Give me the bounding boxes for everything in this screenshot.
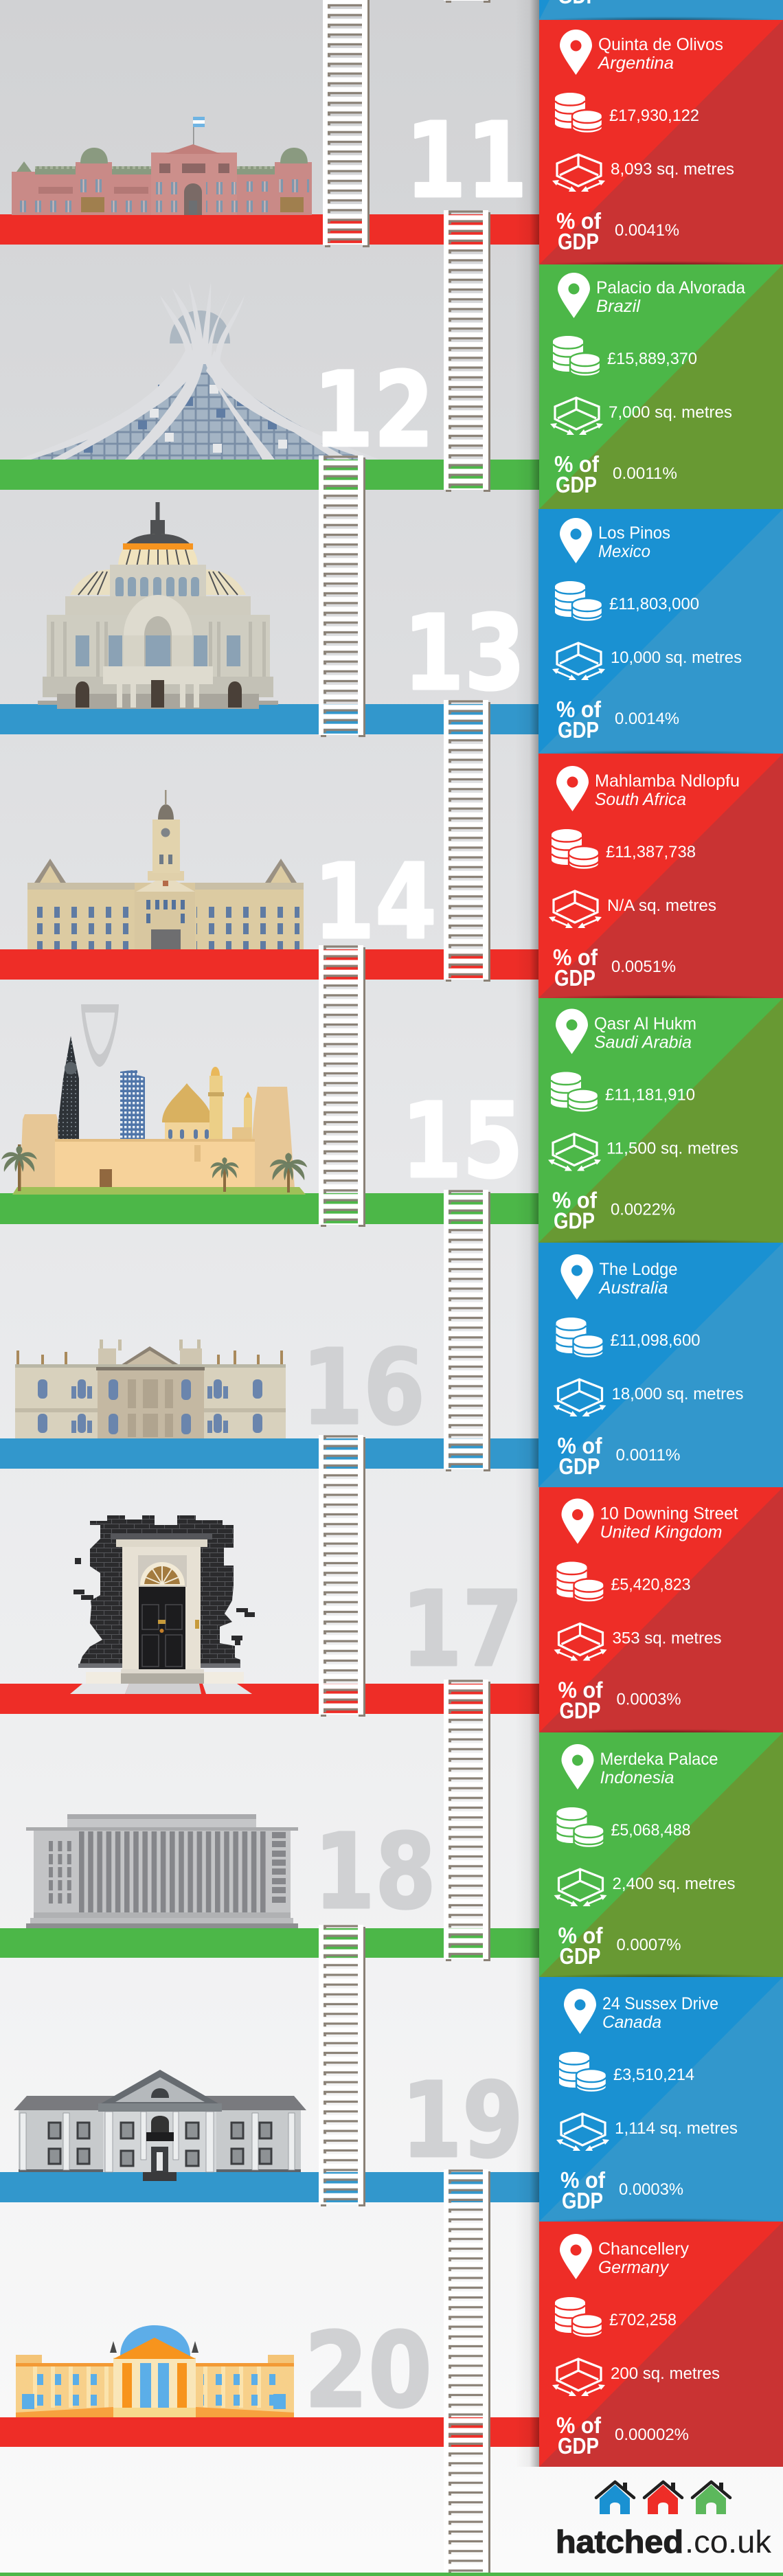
panel: The Lodge: Australia bbox=[598, 1278, 668, 1298]
building: Palacio da Alvorada, Brazil bbox=[19, 282, 380, 460]
panel: 10 Downing Street bbox=[539, 1487, 783, 1732]
panel: Los Pinos: Mexico bbox=[598, 542, 650, 561]
panel shadow on left of the stats column bbox=[515, 0, 539, 2467]
panel: Chancellery: 0.00002% bbox=[615, 2426, 689, 2444]
building: 10 Downing Street, United Kingdom bbox=[70, 1515, 255, 1694]
colour band: residence 19 bbox=[0, 2172, 539, 2202]
panel: 10 Downing Street: 353 sq. metres bbox=[613, 1629, 721, 1647]
panel: Los Pinos: 0.0014% bbox=[615, 710, 679, 728]
building: The Lodge, Australia bbox=[15, 1340, 286, 1438]
logo: hatched.co.uk wordmark bbox=[556, 2524, 772, 2560]
panel: Mahlamba Ndlopfu: South Africa bbox=[595, 790, 686, 809]
ladder: band 12 to band 13 bbox=[319, 455, 365, 737]
panel: 24 Sussex Drive: £3,510,214 bbox=[613, 2066, 694, 2084]
colour band: residence 15 bbox=[0, 1193, 539, 1224]
panel: Los Pinos bbox=[538, 509, 783, 754]
panel: Palacio da Alvorada: Palacio da Alvorada bbox=[596, 278, 745, 297]
panel: Chancellery: GDP bbox=[558, 2433, 599, 2459]
panel: Merdeka Palace: 2,400 sq. metres bbox=[613, 1875, 735, 1893]
panel: Quinta de Olivos: 0.0041% bbox=[615, 221, 679, 240]
panel: Mahlamba Ndlopfu: Mahlamba Ndlopfu bbox=[595, 771, 740, 791]
ladder: band 17 to band 18 bbox=[444, 1680, 490, 1961]
panel: 24 Sussex Drive: GDP bbox=[562, 2188, 603, 2213]
panel: Los Pinos: £11,803,000 bbox=[609, 595, 699, 613]
panel: 10 Downing Street: United Kingdom bbox=[600, 1522, 723, 1541]
colour band: residence 13 bbox=[0, 704, 539, 734]
colour band: residence 11 bbox=[0, 214, 539, 245]
panel: Qasr Al Hukm: Saudi Arabia bbox=[594, 1033, 692, 1052]
panel: Chancellery bbox=[539, 2222, 783, 2467]
panel: Los Pinos: 10,000 sq. metres bbox=[611, 648, 742, 667]
panel: Palacio da Alvorada: % of bbox=[554, 451, 600, 477]
rank number 19: 19 bbox=[401, 2060, 523, 2181]
panel: Los Pinos: % of bbox=[556, 697, 602, 722]
ladder: band 15 to band 16 bbox=[444, 1190, 490, 1471]
panel: 24 Sussex Drive: % of bbox=[560, 2167, 606, 2193]
panel: 10 Downing Street: 10 Downing Street bbox=[600, 1504, 738, 1524]
panel: 10 Downing Street: % of bbox=[558, 1677, 603, 1702]
panel: Mahlamba Ndlopfu: N/A sq. metres bbox=[607, 896, 716, 915]
panel: Palacio da Alvorada: £15,889,370 bbox=[607, 350, 697, 368]
panel: 24 Sussex Drive: 24 Sussex Drive bbox=[602, 1994, 718, 2013]
rank number 16: 16 bbox=[302, 1327, 425, 1448]
building: Mahlamba Ndlopfu, South Africa bbox=[27, 790, 304, 949]
panel: Merdeka Palace: 0.0007% bbox=[617, 1936, 681, 1954]
panel: Merdeka Palace: Indonesia bbox=[600, 1768, 674, 1787]
ladder: band 19 to bottom bbox=[444, 2169, 490, 2573]
panel: Mahlamba Ndlopfu: % of bbox=[553, 945, 598, 970]
ladder: top right stub bbox=[444, 0, 490, 3]
colour band: residence 18 bbox=[0, 1928, 539, 1958]
ladder: band 11 to band 12 bbox=[444, 210, 490, 492]
panel: Palacio da Alvorada bbox=[539, 264, 783, 509]
panel: Qasr Al Hukm: Qasr Al Hukm bbox=[594, 1014, 696, 1033]
panel: 24 Sussex Drive bbox=[539, 1977, 783, 2222]
panel: Mahlamba Ndlopfu bbox=[538, 754, 783, 998]
panel: The Lodge: The Lodge bbox=[599, 1260, 677, 1279]
panel: Qasr Al Hukm: % of bbox=[552, 1187, 598, 1213]
bottom green strip bbox=[0, 2573, 783, 2576]
panel: Quinta de Olivos bbox=[539, 20, 783, 264]
rank number 20: 20 bbox=[304, 2310, 432, 2431]
colour band: residence 16 bbox=[0, 1438, 539, 1469]
panel: 24 Sussex Drive: 1,114 sq. metres bbox=[615, 2119, 738, 2138]
panel: Chancellery: Chancellery bbox=[598, 2239, 689, 2259]
building: Los Pinos, Mexico bbox=[38, 502, 278, 709]
panel: Mahlamba Ndlopfu: 0.0051% bbox=[611, 958, 676, 976]
panel: Los Pinos: GDP bbox=[558, 717, 599, 743]
rank number 14: 14 bbox=[313, 841, 437, 962]
panel: Qasr Al Hukm bbox=[538, 998, 783, 1243]
panel: Merdeka Palace: Merdeka Palace bbox=[600, 1750, 718, 1769]
ladder: band 14 to band 15 bbox=[319, 945, 365, 1227]
panel: Palacio da Alvorada: GDP bbox=[556, 472, 597, 497]
colour band: residence 14 bbox=[0, 949, 539, 980]
panel: The Lodge: % of bbox=[558, 1433, 602, 1458]
panel: Quinta de Olivos: Quinta de Olivos bbox=[598, 35, 723, 54]
panel: Palacio da Alvorada: 7,000 sq. metres bbox=[609, 403, 732, 422]
ladder: band 13 to band 14 bbox=[444, 700, 490, 982]
rank number 18: 18 bbox=[314, 1811, 436, 1932]
panel: 10 Downing Street: GDP bbox=[559, 1698, 600, 1723]
panel: Qasr Al Hukm: 0.0022% bbox=[611, 1201, 675, 1219]
ladder: from above to band 11 bbox=[323, 0, 370, 247]
panel: The Lodge: 0.0011% bbox=[615, 1446, 680, 1465]
panel: Merdeka Palace: GDP bbox=[559, 1943, 600, 1969]
rank number 15: 15 bbox=[401, 1081, 523, 1201]
colour band: residence 17 bbox=[0, 1684, 539, 1714]
panel: The Lodge bbox=[538, 1243, 783, 1487]
panel: Merdeka Palace: £5,068,488 bbox=[611, 1821, 691, 1840]
panel: Quinta de Olivos: 8,093 sq. metres bbox=[611, 160, 734, 179]
ladder: band 18 to band 19 bbox=[319, 1925, 365, 2206]
rank number 13: 13 bbox=[403, 593, 525, 714]
colour band: residence 20 bbox=[0, 2417, 539, 2447]
panel: Los Pinos: Los Pinos bbox=[598, 523, 670, 543]
panel: Quinta de Olivos: GDP bbox=[558, 229, 599, 254]
panel: Quinta de Olivos: Argentina bbox=[597, 54, 674, 73]
panel: previous residence, cropped at top bbox=[539, 0, 783, 20]
ladder: band 16 to band 17 bbox=[319, 1435, 365, 1717]
panel: Quinta de Olivos: £17,930,122 bbox=[609, 106, 699, 125]
rank number 12: 12 bbox=[313, 350, 434, 471]
rank number 17: 17 bbox=[401, 1569, 523, 1690]
panel: Qasr Al Hukm: £11,181,910 bbox=[605, 1085, 695, 1105]
building: Chancellery, Germany bbox=[16, 2325, 294, 2417]
panel: Merdeka Palace bbox=[539, 1732, 783, 1977]
building: Qasr Al Hukm, Saudi Arabia bbox=[1, 1004, 307, 1195]
panel: The Lodge: £11,098,600 bbox=[610, 1331, 701, 1350]
panel: Merdeka Palace: % of bbox=[558, 1923, 603, 1948]
panel: 24 Sussex Drive: 0.0003% bbox=[619, 2180, 683, 2199]
building: Merdeka Palace, Indonesia bbox=[26, 1814, 298, 1928]
logo: three houses bbox=[596, 2482, 730, 2514]
panel: Qasr Al Hukm: 11,500 sq. metres bbox=[606, 1139, 738, 1158]
panel: Mahlamba Ndlopfu: £11,387,738 bbox=[606, 843, 696, 861]
colour band: residence 12 bbox=[0, 460, 539, 490]
panel: Chancellery: Germany bbox=[598, 2258, 669, 2277]
rank number 11: 11 bbox=[405, 100, 527, 221]
panel: Mahlamba Ndlopfu: GDP bbox=[554, 965, 595, 991]
building: Quinta de Olivos, Argentina bbox=[12, 117, 312, 215]
panel: 24 Sussex Drive: Canada bbox=[602, 2013, 661, 2032]
panel: The Lodge: 18,000 sq. metres bbox=[611, 1385, 743, 1403]
logo: hatched.co.uk wordmark: .co.uk bbox=[685, 2524, 772, 2560]
panel: 10 Downing Street: £5,420,823 bbox=[611, 1576, 691, 1594]
panel: Quinta de Olivos: % of bbox=[556, 208, 602, 234]
panel: Qasr Al Hukm: GDP bbox=[554, 1208, 595, 1234]
panel: 10 Downing Street: 0.0003% bbox=[617, 1690, 681, 1709]
panel: Chancellery: % of bbox=[556, 2413, 602, 2438]
building: 24 Sussex Drive, Canada bbox=[14, 2070, 306, 2181]
panel: Palacio da Alvorada: Brazil bbox=[596, 297, 641, 316]
panel: Palacio da Alvorada: 0.0011% bbox=[613, 464, 677, 483]
logo: hatched.co.uk wordmark: hatched bbox=[556, 2524, 683, 2560]
panel: Chancellery: £702,258 bbox=[609, 2311, 677, 2329]
panel: The Lodge: GDP bbox=[559, 1454, 600, 1479]
panel: Chancellery: 200 sq. metres bbox=[611, 2364, 720, 2383]
